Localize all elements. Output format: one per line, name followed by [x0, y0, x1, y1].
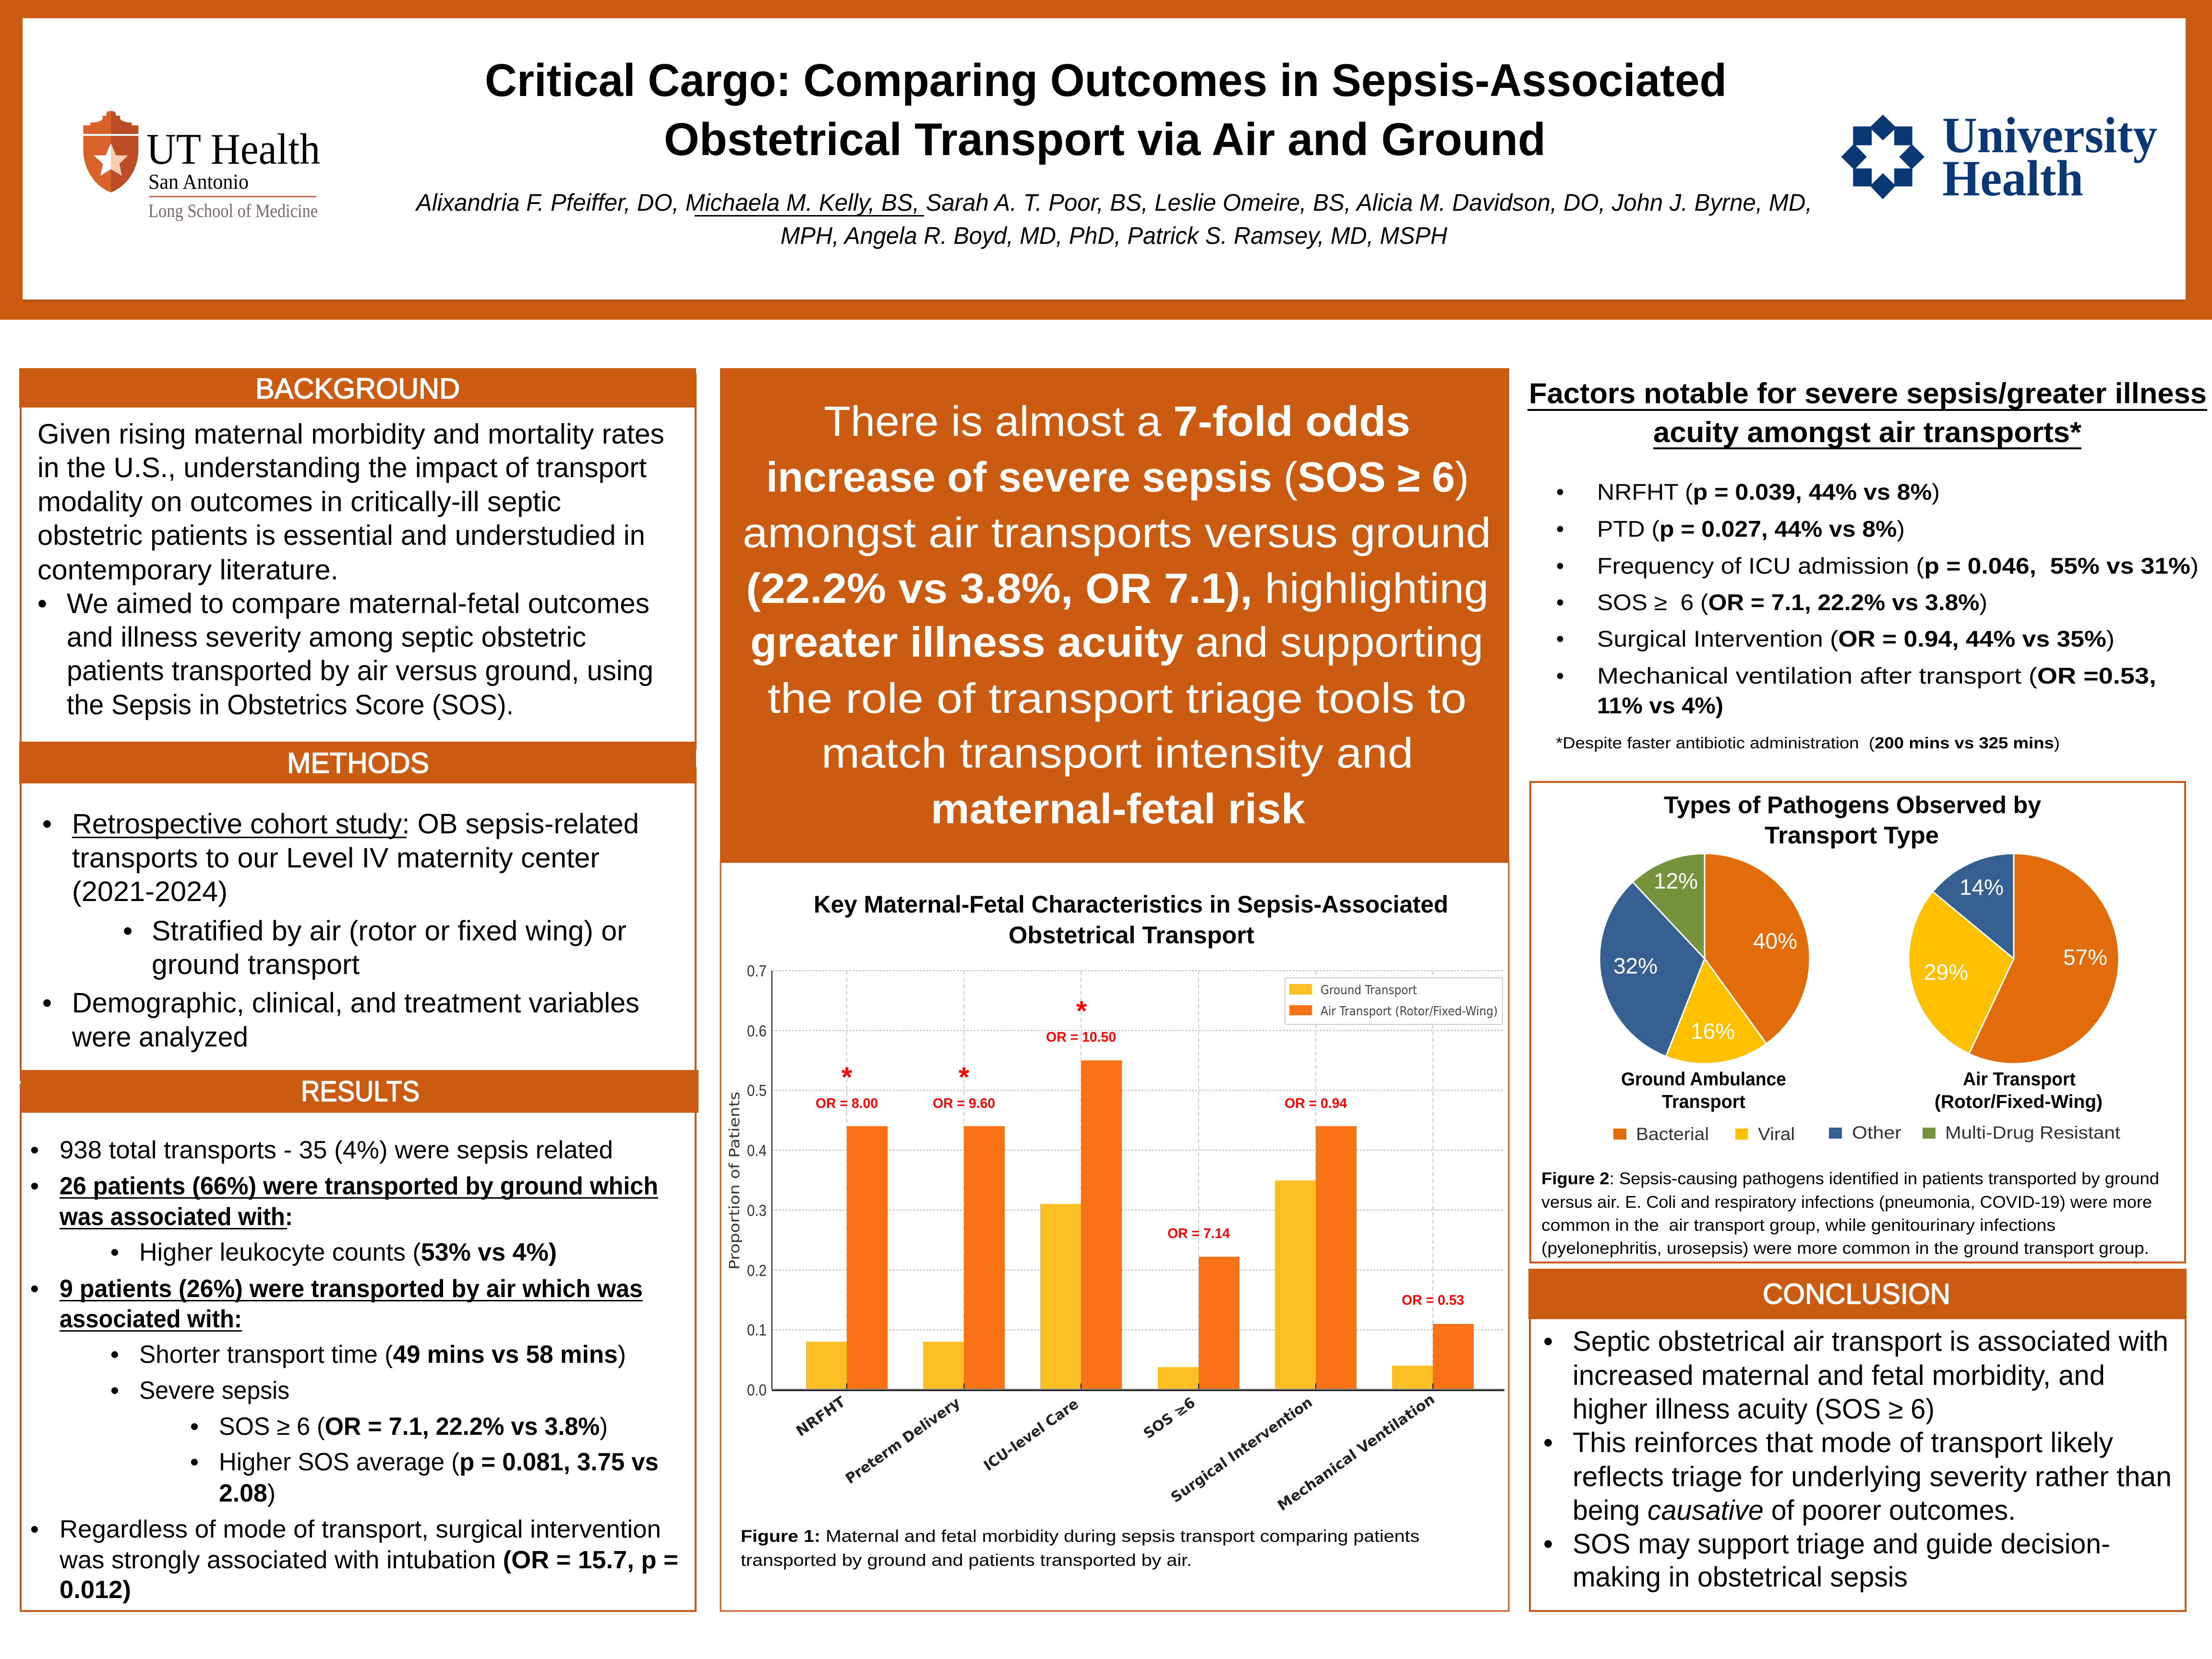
text block: factors list: Surgical Intervention ( OR = 0.94, 44% vs 35% )	[1597, 626, 2115, 651]
heading: results	[21, 1070, 698, 1113]
text block: results: Severe sepsis	[139, 1377, 289, 1405]
odds ratio labels	[816, 996, 1464, 1308]
logo: University Health: Health	[1942, 150, 2083, 206]
pie label: ground: Ground Ambulance	[1621, 1069, 1786, 1090]
text block: results: 9 patients (26%) were transported by air which was	[60, 1275, 643, 1303]
text block: results: Regardless of mode of transport, surgical intervention	[60, 1515, 661, 1543]
text block: factors list: Frequency of ICU admission ( p = 0.046, 55% vs 31% )	[1597, 553, 2199, 578]
x axis labels: ICU-level Care	[980, 1397, 1083, 1474]
text block: background: obstetric patients is essential and understudied in	[37, 520, 645, 551]
text block: results: •	[190, 1448, 199, 1476]
odds ratio labels: OR = 9.60	[933, 1096, 995, 1111]
heading: factors notable: Factors notable for severe sepsis/greater illness	[1529, 377, 2207, 409]
text block: factors list: •	[1556, 663, 1564, 688]
chart legend: Ground Transport	[1321, 983, 1417, 998]
y axis tick labels: 0.5	[747, 1082, 767, 1099]
bar chart	[726, 962, 1504, 1514]
text block: conclusion: making in obstetrical sepsis	[1573, 1562, 1908, 1593]
pie chart: air transport: 14%	[1960, 875, 2004, 900]
text block: background: in the U.S., understanding the impact of transport	[37, 452, 647, 483]
odds ratio labels: OR = 10.50	[1046, 1030, 1116, 1045]
pie label: air	[1935, 1069, 2103, 1112]
text block: conclusion: •	[1543, 1326, 1553, 1357]
text block: methods: •	[42, 808, 52, 840]
text block: methods: •	[42, 987, 52, 1019]
y axis tick labels: 0.0	[747, 1381, 767, 1399]
text block: results: 0.012)	[60, 1576, 131, 1604]
figure 2 caption: (pyelonephritis, urosepsis) were more common in the ground transport group.	[1541, 1239, 2149, 1258]
text block: background: and illness severity among septic obstetric	[67, 622, 586, 653]
text block: methods: (2021-2024)	[72, 876, 228, 907]
x axis labels: NRFHT	[792, 1394, 851, 1439]
chart title	[1664, 792, 2041, 849]
y axis tick labels: 0.2	[747, 1262, 767, 1279]
panel: key finding callout: There is almost a 7-fold odds	[824, 397, 1410, 445]
text block: factors list: •	[1556, 479, 1564, 505]
heading: methods: METHODS	[287, 747, 429, 779]
figure 1 caption: Figure 1: Maternal and fetal morbidity during sepsis transport comparing patients	[741, 1527, 1419, 1546]
x axis labels	[792, 1392, 1439, 1514]
y axis tick labels	[747, 962, 767, 1399]
text block: results: •	[190, 1413, 199, 1441]
y axis tick labels: 0.6	[747, 1022, 767, 1040]
panel: key finding callout: increase of severe sepsis (SOS ≥ 6)	[766, 453, 1469, 501]
text block: conclusion: Septic obstetrical air transport is associated with	[1573, 1326, 2168, 1357]
text block: factors list: PTD (p = 0.027, 44% vs 8% )	[1597, 516, 1905, 541]
text block: factors list	[1556, 479, 2199, 718]
title: Critical Cargo: Comparing Outcomes in Sepsis-Associated	[485, 55, 1727, 106]
footnote: *Despite faster antibiotic administration ( 200 mins vs 325 mins )	[1556, 734, 2060, 752]
title: Obstetrical Transport via Air and Ground	[664, 114, 1546, 165]
pie chart: air transport: 57%	[2063, 945, 2107, 970]
text block: results: •	[110, 1341, 119, 1369]
chart legend	[1285, 978, 1503, 1024]
text block: factors list: •	[1556, 589, 1564, 615]
heading: factors notable	[1527, 377, 2207, 449]
logo: UT Health San Antonio: Long School of Medicine	[148, 201, 318, 221]
text block: background: the Sepsis in Obstetrics Score (SOS).	[67, 689, 514, 721]
figure 2 caption	[1541, 1169, 2159, 1258]
pie label: ground	[1621, 1069, 1786, 1112]
figure 1 caption: transported by ground and patients transported by air.	[741, 1551, 1192, 1570]
pie chart: ground ambulance: 32%	[1613, 953, 1658, 978]
text block: background: contemporary literature.	[37, 554, 338, 586]
panel: results	[21, 1070, 698, 1611]
text block: results: SOS ≥ 6 (OR = 7.1, 22.2% vs 3.8%)	[219, 1413, 608, 1441]
text block: results: •	[30, 1275, 39, 1303]
pie label: ground: Transport	[1662, 1092, 1745, 1112]
panel: key finding callout: the role of transport triage tools to	[768, 674, 1467, 722]
text block: results: Shorter transport time (49 mins vs 58 mins)	[139, 1341, 626, 1369]
pie legend: Multi-Drug Resistant	[1945, 1123, 2121, 1142]
chart title: Key Maternal-Fetal Characteristics in Sepsis-Associated	[814, 891, 1448, 918]
panel: background	[19, 368, 696, 749]
text block: results	[30, 1136, 678, 1604]
text block: methods	[42, 808, 639, 1053]
text block: results: was associated with:	[59, 1203, 293, 1231]
y axis label: Proportion of Patients	[726, 1092, 743, 1270]
authors: Alixandria F. Pfeiffer, DO, Michaela M. Kelly, BS, Sarah A. T. Poor, BS, Leslie Omeire, BS, Alicia M. Davidson, DO, John J. Byrne, MD,	[415, 189, 1812, 216]
y axis tick labels: 0.7	[747, 962, 767, 980]
x axis labels: Surgical Intervention	[1167, 1395, 1317, 1505]
text block: results: Higher leukocyte counts (53% vs 4%)	[139, 1238, 557, 1266]
y axis tick labels: 0.3	[747, 1202, 767, 1219]
pie chart: ground ambulance	[1599, 854, 1810, 1064]
figure 2 caption: common in the air transport group, while genitourinary infections	[1541, 1216, 2056, 1235]
series: air transport bars	[847, 1060, 1474, 1390]
y axis tick labels: 0.1	[747, 1321, 767, 1339]
logo: UT Health San Antonio	[84, 111, 320, 221]
title	[485, 55, 1727, 165]
odds ratio labels: *	[1076, 996, 1087, 1027]
heading: results: RESULTS	[301, 1075, 420, 1107]
text block: conclusion: •	[1543, 1427, 1553, 1458]
odds ratio labels: OR = 0.53	[1402, 1293, 1464, 1308]
text block: results: •	[30, 1172, 39, 1200]
heading: background	[19, 368, 696, 408]
figure 2 caption: Figure 2: Sepsis-causing pathogens identified in patients transported by ground	[1541, 1169, 2159, 1188]
pie legend: Viral	[1758, 1124, 1795, 1144]
logo: University Health	[1841, 107, 2157, 206]
authors: MPH, Angela R. Boyd, MD, PhD, Patrick S. Ramsey, MD, MSPH	[781, 222, 1448, 249]
text block: background: Given rising maternal morbidity and mortality rates	[37, 419, 664, 450]
text block: methods: Stratified by air (rotor or fixed wing) or	[152, 915, 626, 947]
panel: figure 1 bar chart	[721, 862, 1509, 1611]
text block: results: 938 total transports - 35 (4%) were sepsis related	[60, 1136, 613, 1164]
figure 2 caption: versus air. E. Coli and respiratory infections (pneumonia, COVID-19) were more	[1541, 1193, 2152, 1212]
text block: conclusion: This reinforces that mode of transport likely	[1573, 1427, 2113, 1458]
odds ratio labels: OR = 7.14	[1167, 1226, 1230, 1241]
x axis labels: SOS ≥6	[1140, 1395, 1200, 1442]
heading: conclusion	[1528, 1269, 2187, 1319]
pie chart: ground ambulance: 12%	[1654, 868, 1698, 893]
text block: methods: •	[123, 915, 132, 947]
text block: background: •	[37, 588, 47, 619]
y axis tick labels: 0.4	[747, 1142, 767, 1159]
logo: University Health: University	[1942, 107, 2157, 163]
heading: conclusion: CONCLUSION	[1763, 1278, 1950, 1310]
text block: methods: were analyzed	[72, 1022, 248, 1053]
text block: conclusion	[1543, 1326, 2172, 1593]
logo: UT Health San Antonio: UT Health	[146, 125, 320, 173]
authors	[415, 189, 1812, 249]
pie label: air: Air Transport	[1963, 1069, 2076, 1090]
pie chart: ground ambulance: 16%	[1691, 1019, 1735, 1044]
pie chart: air transport	[1909, 854, 2119, 1064]
text block: factors list: Mechanical ventilation after transport ( OR =0.53,	[1597, 663, 2156, 688]
pie label: air: (Rotor/Fixed-Wing)	[1935, 1092, 2103, 1112]
odds ratio labels: *	[959, 1062, 970, 1093]
panel: key finding callout: amongst air transports versus ground	[743, 509, 1491, 556]
odds ratio labels: OR = 0.94	[1285, 1096, 1347, 1111]
text block: results: Higher SOS average (p = 0.081, 3.75 vs	[219, 1448, 659, 1476]
heading: methods	[19, 742, 696, 783]
x axis labels: Mechanical Ventilation	[1274, 1392, 1439, 1514]
panel: key finding callout: maternal-fetal risk	[931, 785, 1306, 832]
text block: conclusion: higher illness acuity (SOS ≥ 6)	[1573, 1394, 1935, 1425]
text block: factors list: NRFHT ( p = 0.039, 44% vs 8% )	[1597, 479, 1940, 505]
text block: factors list: 11% vs 4%)	[1597, 693, 1723, 718]
text block: methods: transports to our Level IV maternity center	[72, 842, 600, 874]
text block: background	[37, 419, 664, 721]
chart legend: Air Transport (Rotor/Fixed-Wing)	[1321, 1004, 1498, 1019]
chart title: Transport Type	[1765, 822, 1939, 849]
text block: methods: Retrospective cohort study: OB sepsis-related	[72, 808, 639, 840]
panel: methods	[19, 742, 696, 1080]
odds ratio labels: *	[842, 1062, 853, 1093]
panel: key finding callout: greater illness acuity and supporting	[750, 618, 1483, 666]
text block: conclusion: •	[1543, 1528, 1553, 1560]
logo: UT Health San Antonio: San Antonio	[148, 170, 249, 193]
header band	[0, 0, 2212, 320]
text block: results: 2.08)	[219, 1479, 276, 1507]
text block: results: •	[110, 1238, 119, 1266]
text block: results: •	[110, 1377, 119, 1405]
text block: results: 26 patients (66%) were transported by ground which	[60, 1172, 658, 1200]
pie legend: Bacterial	[1636, 1124, 1709, 1144]
text block: background: We aimed to compare maternal-fetal outcomes	[67, 588, 649, 619]
text block: factors list: SOS ≥ 6 ( OR = 7.1, 22.2% vs 3.8% )	[1597, 589, 1987, 615]
icon: UT Health shield	[84, 111, 138, 192]
pie chart: ground ambulance: 40%	[1753, 928, 1797, 953]
panel: key finding callout: (22.2% vs 3.8%, OR 7.1), highlighting	[746, 565, 1489, 612]
text block: factors list: •	[1556, 553, 1564, 578]
icon: University Health star	[1841, 115, 1924, 199]
series: ground transport bars	[806, 1180, 1433, 1390]
chart title: Types of Pathogens Observed by	[1664, 792, 2041, 818]
pie legend	[1613, 1123, 2121, 1144]
figure 1 caption	[741, 1527, 1419, 1570]
heading: factors notable: acuity amongst air transports*	[1653, 416, 2082, 448]
text block: results: was strongly associated with intubation (OR = 15.7, p =	[59, 1546, 678, 1574]
chart title: Obstetrical Transport	[1009, 922, 1254, 949]
pie legend: Other	[1852, 1123, 1901, 1142]
text block: conclusion: increased maternal and fetal morbidity, and	[1573, 1360, 2105, 1391]
text block: results: •	[30, 1136, 39, 1164]
panel: conclusion	[1528, 1269, 2187, 1611]
text block: methods: ground transport	[152, 949, 360, 980]
text block: factors list: •	[1556, 516, 1564, 541]
text block: background: patients transported by air versus ground, using	[67, 655, 653, 686]
text block: factors list: •	[1556, 626, 1564, 651]
heading: background: BACKGROUND	[255, 373, 460, 405]
text block: conclusion: being causative of poorer outcomes.	[1573, 1495, 2016, 1526]
panel: figure 2 pie charts	[1530, 782, 2185, 1262]
panel: key finding callout: match transport intensity and	[821, 729, 1413, 777]
odds ratio labels: OR = 8.00	[816, 1096, 878, 1111]
text block: results: •	[30, 1515, 39, 1543]
text block: background: modality on outcomes in critically-ill septic	[37, 486, 561, 517]
chart title	[814, 891, 1448, 949]
text block: conclusion: SOS may support triage and guide decision-	[1573, 1528, 2110, 1560]
text block: results: associated with:	[60, 1305, 242, 1333]
x axis labels: Preterm Delivery	[842, 1395, 965, 1487]
panel: key finding callout	[720, 368, 1509, 862]
text block: methods: Demographic, clinical, and treatment variables	[72, 987, 639, 1019]
pie chart: air transport: 29%	[1924, 960, 1968, 985]
text block: conclusion: reflects triage for underlying severity rather than	[1573, 1461, 2172, 1492]
